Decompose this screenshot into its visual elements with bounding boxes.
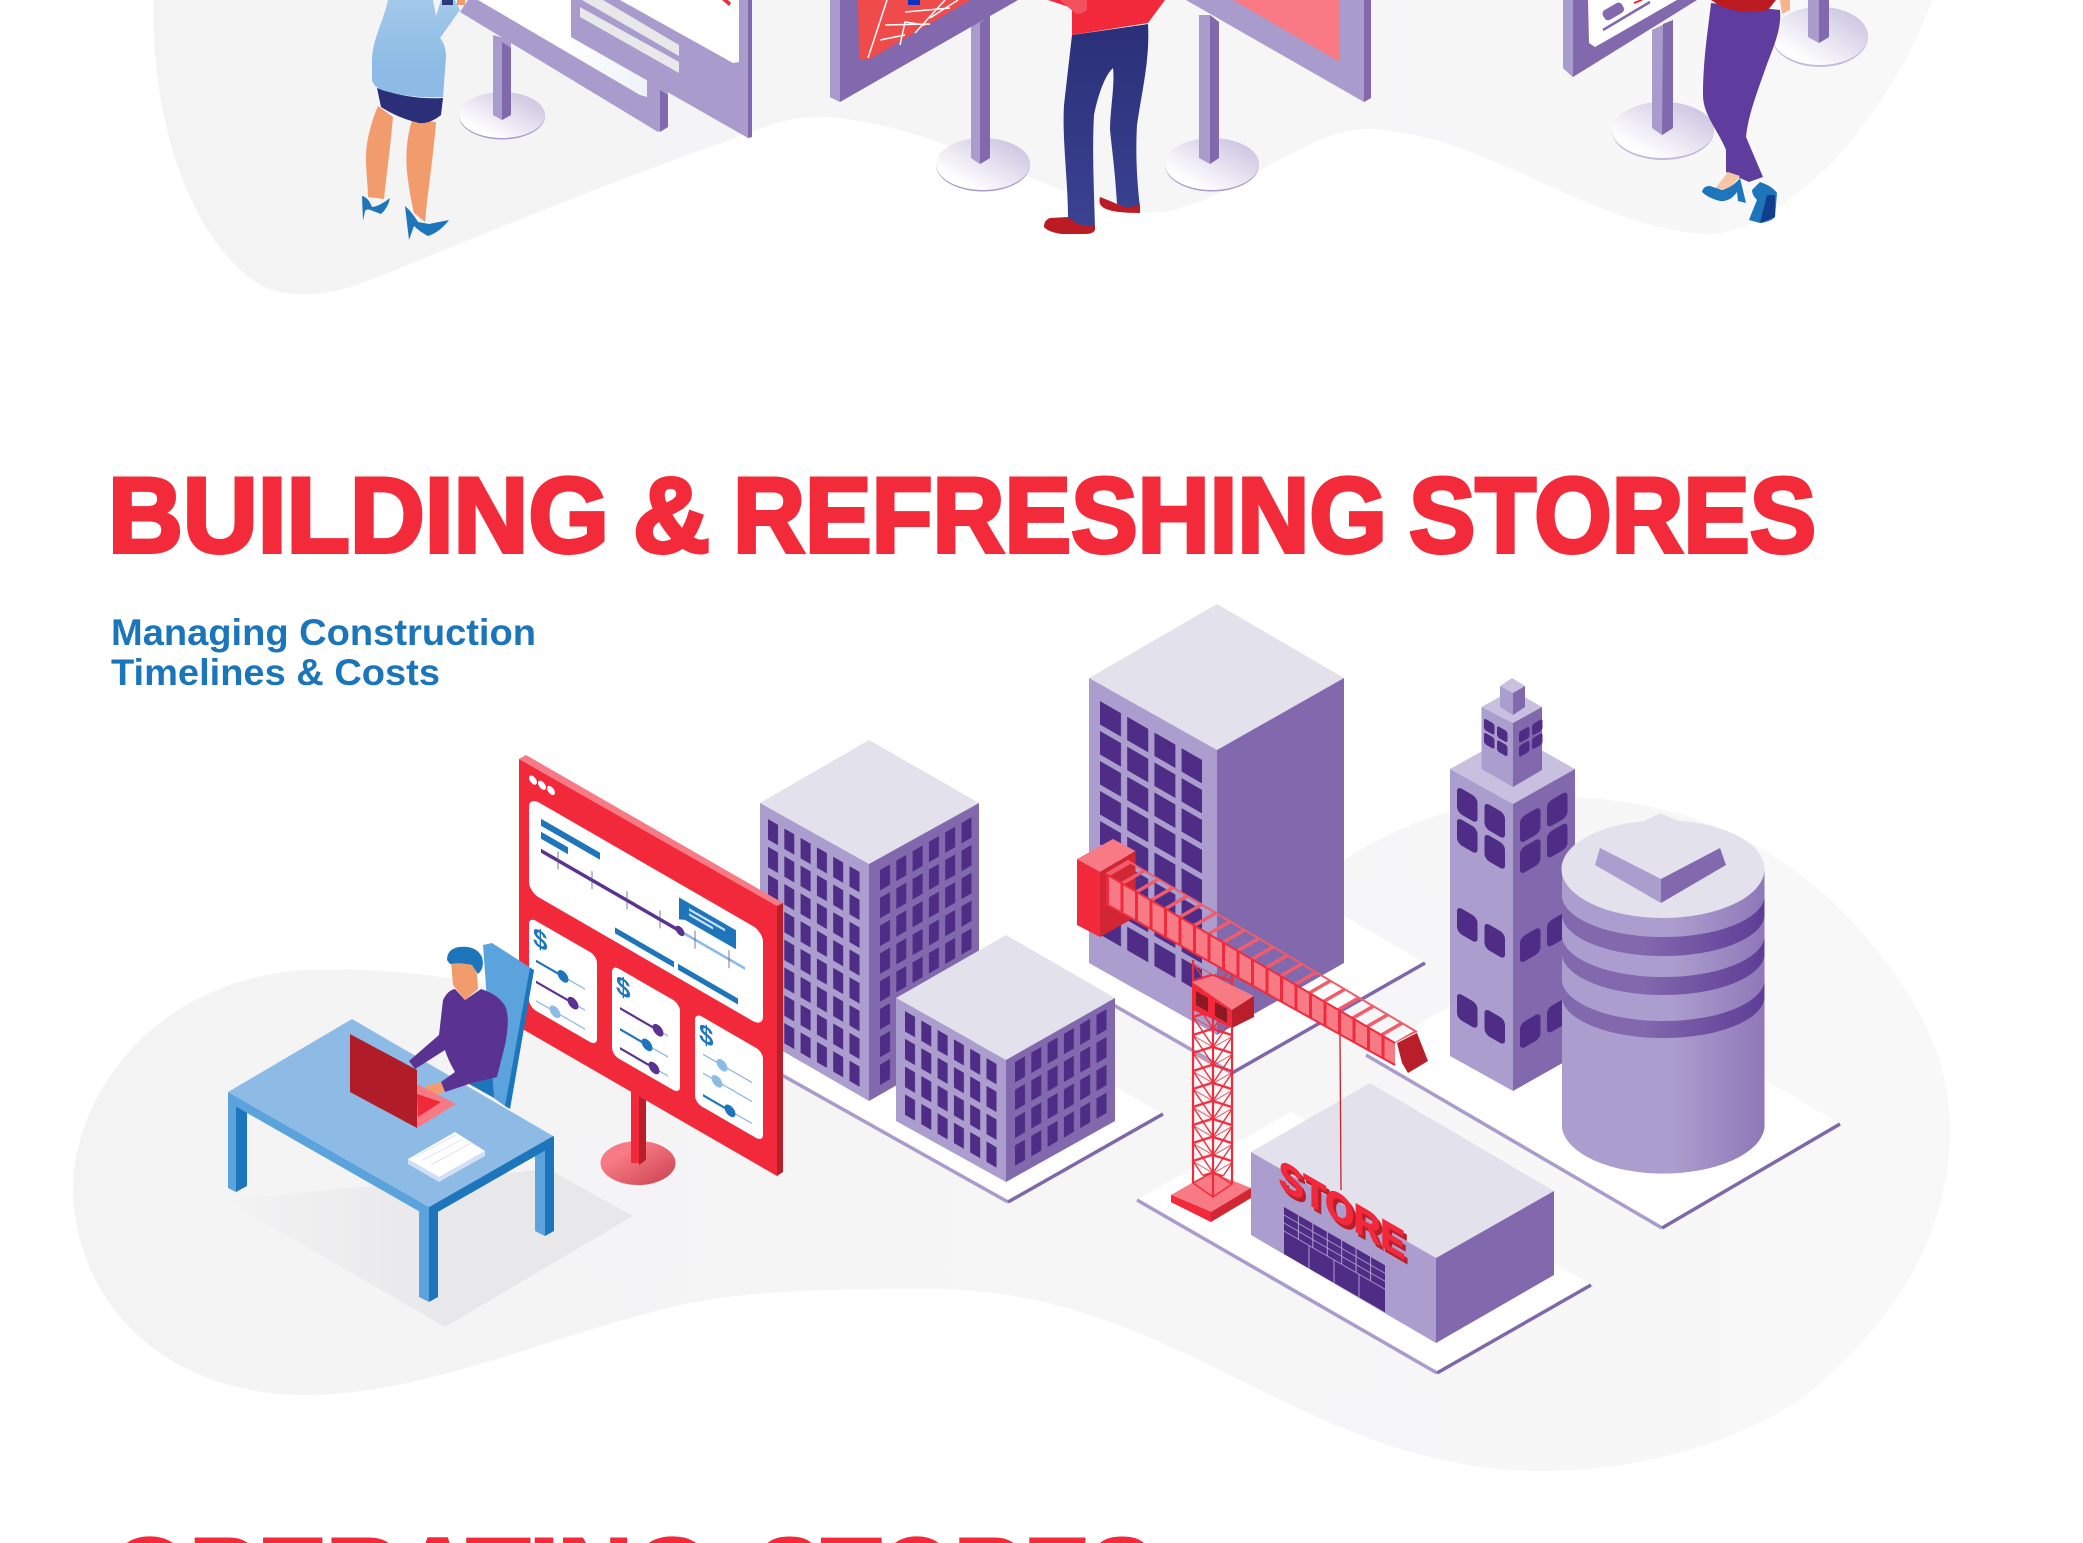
crane tower base (1171, 1172, 1251, 1222)
cost panel 1 (529, 917, 597, 1046)
left billboard pair (459, 0, 752, 140)
subtitle: managing construction timelines and costs: Timelines & Costs (111, 651, 440, 693)
crane counterweight (1077, 839, 1136, 937)
crane jib (1106, 861, 1428, 1073)
chair (469, 943, 534, 1109)
desk (228, 1019, 554, 1302)
platform: tall building (1035, 850, 1425, 1073)
timeline panel (529, 797, 763, 1027)
heading: building and refreshing stores: STORES (1409, 455, 1816, 575)
laptop (350, 1034, 456, 1128)
middle billboard left (830, 0, 1030, 192)
background blob: top scene (154, 0, 1932, 294)
store windows (1284, 1207, 1385, 1312)
platform: store (1137, 1112, 1591, 1373)
heading: building and refreshing stores: & (633, 455, 710, 575)
crane (1077, 839, 1428, 1197)
cost panel 3 (695, 1013, 763, 1142)
heading: operating stores (cropped) (110, 1516, 1154, 1543)
woman in blue sweater (362, 0, 465, 240)
papers on desk (408, 1132, 485, 1182)
platform: tower and drum (1366, 951, 1840, 1228)
middle billboard right (1165, 0, 1371, 192)
store building (1251, 1083, 1554, 1343)
subtitle: managing construction timelines and costs (111, 611, 536, 693)
crane tower lattice (1193, 960, 1232, 1197)
background blob: construction scene (73, 797, 1950, 1471)
man in red shirt (1044, 0, 1165, 234)
building: tall office tower (1089, 604, 1344, 1035)
woman in purple trousers (1702, 0, 1790, 223)
subtitle: managing construction timelines and costs: Managing Construction (111, 611, 536, 653)
cost panel 2: $ (616, 969, 631, 1006)
building: cylindrical drum with check mark roof (1562, 813, 1764, 1174)
desk shadow (225, 1169, 633, 1327)
heading: building and refreshing stores (108, 455, 1816, 575)
building: left office block (760, 740, 979, 1101)
heading: building and refreshing stores: BUILDING (108, 455, 609, 575)
cost panel 2 (612, 965, 680, 1094)
store sign: STORE (1282, 1156, 1408, 1273)
billboard stand (600, 1090, 676, 1185)
heading: building and refreshing stores: REFRESHING (733, 455, 1387, 575)
platform: two office blocks (755, 970, 1163, 1202)
dashboard billboard (519, 755, 783, 1185)
seated person (409, 947, 508, 1095)
cost panel 1: $ (533, 921, 548, 958)
cost panel 3: $ (699, 1017, 714, 1054)
right billboard pair (1563, 0, 1868, 160)
building: stepped tower (1450, 678, 1575, 1091)
store sign: STORE (1279, 1152, 1405, 1269)
building: small office block (896, 935, 1115, 1182)
crane cabin (1192, 976, 1254, 1028)
crane hook cable (1340, 1035, 1341, 1190)
